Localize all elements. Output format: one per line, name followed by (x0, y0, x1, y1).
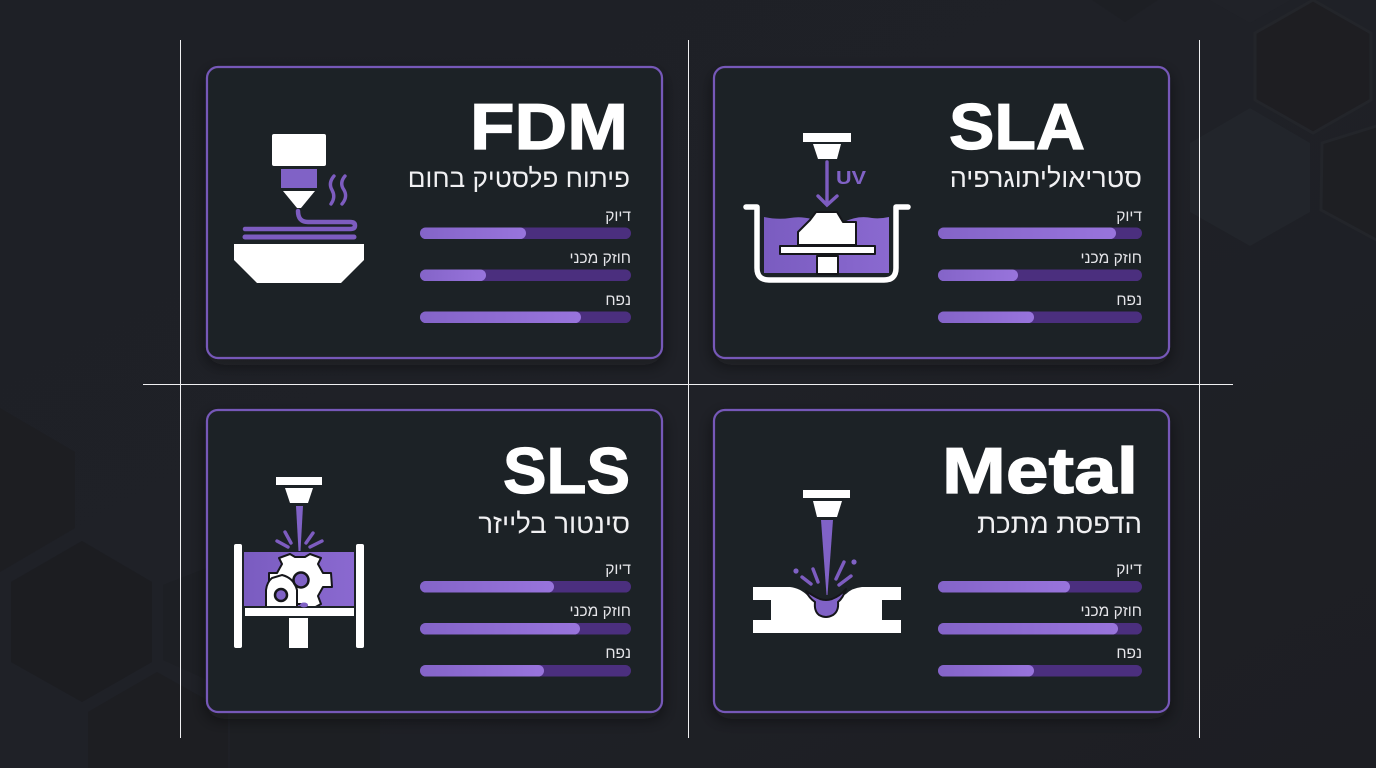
infographic canvas (143, 40, 1233, 738)
panel: Metal (714, 410, 1169, 712)
metric: volume: נפח (1116, 292, 1142, 309)
metric: accuracy (938, 561, 1142, 592)
subtitle: הדפסת מתכת (977, 508, 1142, 539)
metric: accuracy: דיוק (605, 561, 631, 578)
card frame (714, 410, 1169, 712)
metric: mechanical strength (938, 250, 1142, 281)
metric: volume (938, 645, 1142, 676)
icon: SLA resin vat: UV (836, 168, 866, 188)
subtitle: סינטור בלייזר (478, 508, 630, 539)
metric: volume (420, 292, 631, 323)
metric: accuracy (938, 208, 1142, 239)
card frame (207, 67, 662, 358)
metric: mechanical strength: חוזק מכני (569, 603, 631, 620)
grid line: centre vertical (688, 40, 689, 738)
metric: mechanical strength: חוזק מכני (569, 250, 631, 267)
title: Metal: Metal (942, 434, 1138, 507)
icon: metal laser melting (753, 490, 901, 633)
title: SLA: SLA (949, 90, 1085, 163)
icon: FDM extruder (234, 134, 364, 283)
card frame (207, 410, 662, 712)
metric: volume: נפח (605, 645, 631, 662)
grid line: right vertical (1199, 40, 1200, 738)
subtitle: סטריאוליתוגרפיה (950, 163, 1142, 193)
metric: accuracy: דיוק (605, 208, 631, 225)
grid line: left vertical (180, 40, 181, 738)
subtitle: פיתוח פלסטיק בחום (408, 163, 630, 193)
metric: accuracy (420, 561, 631, 592)
metric: volume: נפח (605, 292, 631, 309)
panel: SLA (714, 67, 1169, 358)
metric: volume: נפח (1116, 645, 1142, 662)
metric: mechanical strength (420, 603, 631, 634)
icon: SLS laser sintering (234, 477, 364, 648)
metric: accuracy: דיוק (1116, 561, 1142, 578)
metric: volume (420, 645, 631, 676)
panel: SLS (207, 410, 662, 712)
metric: volume (938, 292, 1142, 323)
metric: mechanical strength: חוזק מכני (1080, 603, 1142, 620)
panel: FDM (207, 67, 662, 358)
icon: SLA resin vat (746, 133, 908, 280)
metric: mechanical strength: חוזק מכני (1080, 250, 1142, 267)
grid line: horizontal (143, 384, 1233, 385)
title: FDM: FDM (470, 90, 628, 163)
metric: accuracy: דיוק (1116, 208, 1142, 225)
card frame (714, 67, 1169, 358)
title: SLS: SLS (503, 434, 630, 507)
metric: mechanical strength (420, 250, 631, 281)
metric: mechanical strength (938, 603, 1142, 634)
metric: accuracy (420, 208, 631, 239)
